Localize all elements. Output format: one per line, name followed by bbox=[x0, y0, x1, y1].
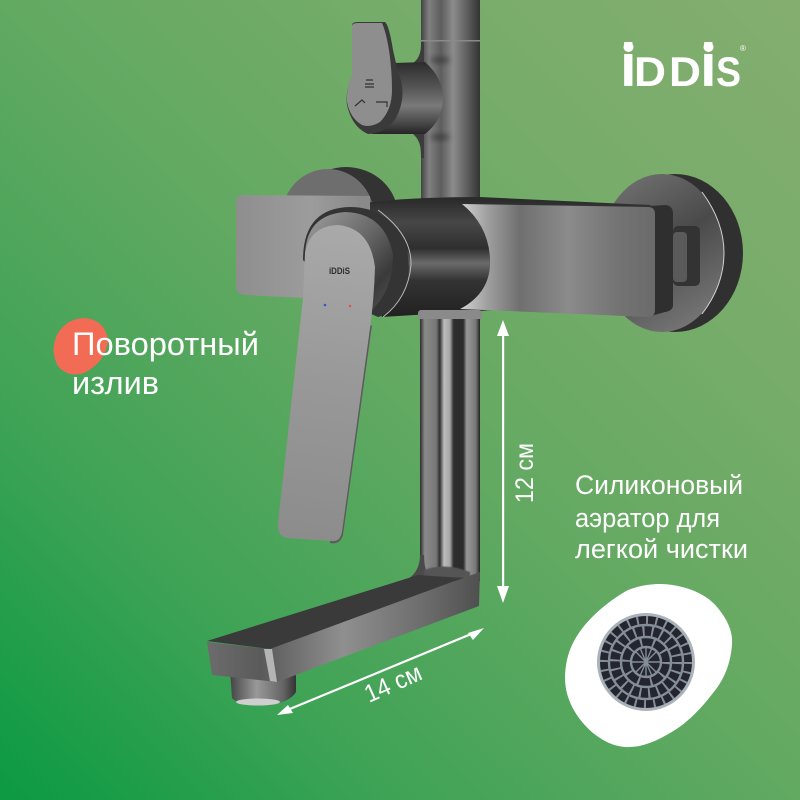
label: silicone aerator: Силиконовый bbox=[575, 470, 743, 500]
label: silicone aerator: легкой чистки bbox=[575, 534, 748, 564]
logo: IDDIS: i bbox=[700, 32, 717, 99]
aerator callout bbox=[565, 584, 732, 747]
cold mark bbox=[324, 304, 326, 306]
faucet bbox=[207, 0, 743, 706]
left wall flange bbox=[282, 167, 398, 265]
right wall flange bbox=[600, 174, 743, 332]
logo: IDDIS: i bbox=[620, 32, 637, 99]
label: silicone aerator: аэратор для bbox=[575, 503, 720, 533]
logo: IDDIS: D bbox=[669, 48, 701, 95]
diverter symbols bbox=[355, 80, 387, 107]
spout front face bbox=[207, 572, 480, 682]
left mounting plate bbox=[236, 195, 370, 305]
arrow: 12 cm height bbox=[497, 320, 509, 603]
white blob bbox=[565, 584, 732, 747]
hot mark bbox=[349, 305, 351, 307]
spout top face bbox=[207, 575, 463, 649]
label: silicone aerator bbox=[575, 470, 748, 564]
logo: IDDIS bbox=[620, 32, 746, 99]
label: 14 cm: 14 см bbox=[360, 658, 426, 708]
handle logo: iDDiS bbox=[329, 266, 350, 277]
coral accent blob bbox=[54, 318, 108, 374]
right mounting plate bbox=[460, 204, 655, 317]
label: swivel spout: излив bbox=[72, 365, 159, 401]
diverter cylinder bbox=[372, 62, 443, 134]
central body bbox=[350, 197, 655, 317]
label: swivel spout bbox=[72, 326, 259, 401]
diverter lever bbox=[347, 22, 403, 134]
aerator tip bbox=[230, 670, 296, 706]
logo: IDDIS: ® bbox=[740, 44, 746, 53]
mixer handle base ring bbox=[303, 207, 411, 317]
logo: IDDIS: S bbox=[716, 48, 741, 95]
arrow: 14 cm length bbox=[277, 628, 484, 715]
aerator mesh icon bbox=[597, 613, 695, 711]
label: swivel spout: Поворотный bbox=[72, 326, 259, 362]
logo: IDDIS: D bbox=[634, 48, 666, 95]
spout vertical pipe bbox=[408, 310, 482, 581]
label: 12 cm: 12 см bbox=[511, 443, 539, 503]
mixer lever handle bbox=[278, 225, 375, 543]
upper shower pipe bbox=[412, 0, 480, 200]
spout bbox=[207, 572, 480, 706]
